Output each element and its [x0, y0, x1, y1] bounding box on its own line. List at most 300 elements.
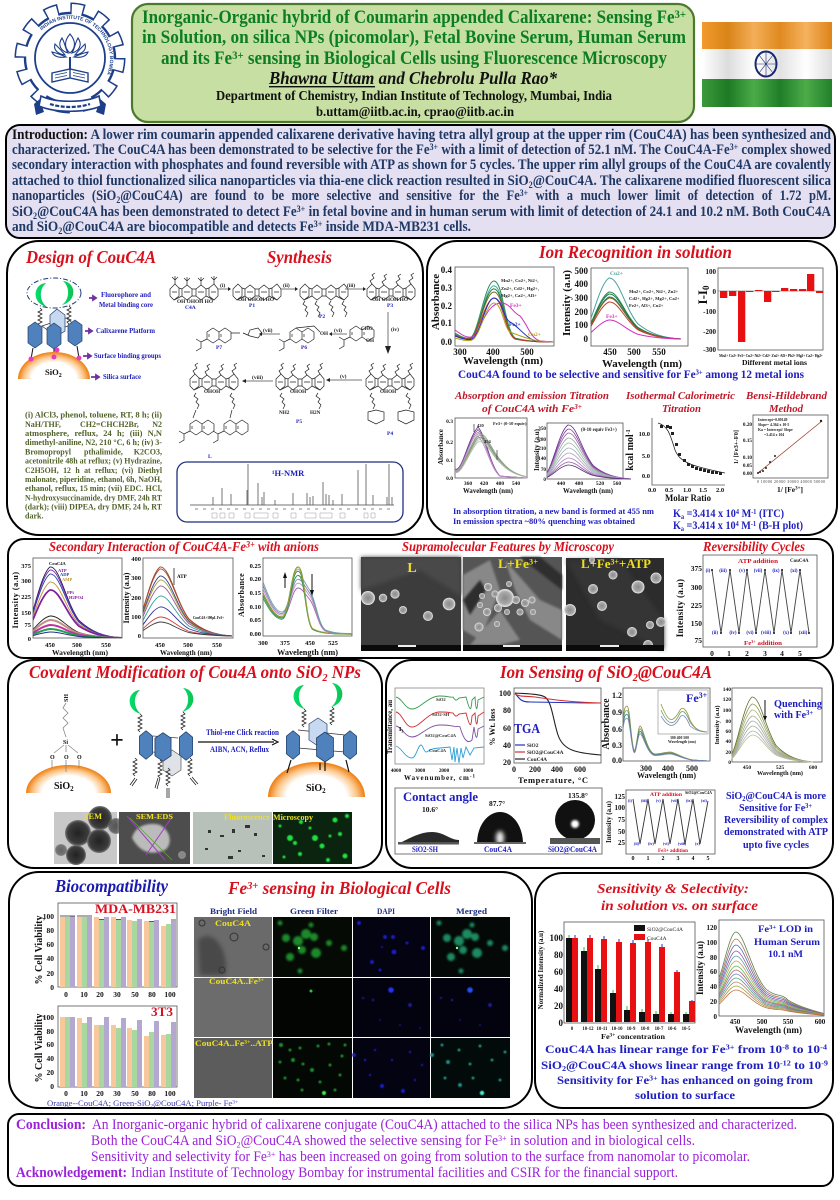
chart: viability MDA-MB231: 10 [80, 990, 88, 999]
title heading: in Solution, on silica NPs (picomolar), Fetal Bovine Serum, Human Serum [142, 27, 686, 48]
chart: TGA: Temperature, °C [518, 775, 588, 785]
chart: LOD in human serum: Human Serum [754, 938, 820, 948]
chart: reversibility cycles: (ii) [712, 631, 718, 636]
image: SEM L [361, 557, 461, 651]
chart: emission of metal ions [561, 266, 688, 370]
chart: emission with anions: Intensity (a.u) [10, 571, 20, 629]
chart: absorbance with ATP: 0.10 [250, 604, 261, 611]
arrow: thiol-ene click reaction: Thiol-ene Click reaction [206, 727, 279, 737]
chart: normalized intensity bars: Normalized Intensity (a.u) [537, 930, 545, 1009]
chart: reversibility cycles: 0 [710, 649, 714, 658]
chart: emission quenching on silica: 3+ [806, 709, 813, 717]
chart: normalized intensity bars: 100 [550, 933, 564, 943]
panel: introduction: nanoparticles (SiO [12, 188, 133, 204]
chart: Benesi-Hildebrand plot: 0.00 [743, 471, 752, 477]
chart: TGA: 40 [503, 741, 511, 750]
chart: ITC titration: -1 [626, 429, 632, 434]
chart: reversibility on silica: Fe3+ addition [658, 849, 688, 854]
chart: ITC titration: 1.5 [699, 487, 708, 494]
chart: reversibility on silica: 2 [662, 856, 664, 862]
panel: conclusion and acknowledgement: Sensitivity and selectivity for Fe [91, 1149, 279, 1165]
summary text: upto five cycles [743, 839, 810, 851]
chart: reversibility cycles: 300 [691, 583, 702, 592]
summary text: SiO [541, 1058, 560, 1072]
synthesis scheme: P7 [216, 345, 222, 351]
chart: emission with ATP: Intensity (a.u) [121, 572, 131, 624]
affiliation: b.uttam@iitb.ac.in, cprao@iitb.ac.in [316, 104, 514, 119]
chart: absorbance of metal ions: 0.2 [441, 301, 452, 311]
image: SEM-EDS [119, 812, 190, 864]
title heading: 3+ [675, 7, 686, 21]
legend: Orange--CouC4A; Green-SiO [47, 1099, 143, 1108]
diagram: thiol silica: SiO [54, 781, 70, 792]
diagram: thiol silica: 2 [70, 785, 74, 793]
chart: normalized intensity bars [537, 922, 695, 1041]
chart: emission of metal ions: 500 [574, 266, 588, 276]
image: contact angle: SiO2-SH [412, 845, 439, 854]
panel: introduction: 2 [33, 211, 38, 221]
image: fluorescence green: Microscopy [273, 813, 313, 822]
diagram: CouC4A design [18, 278, 90, 379]
chart: TGA [488, 688, 601, 785]
chart: absorption titration: Wavelength (nm) [463, 487, 514, 495]
chart: absorbance of metal ions: Mn2+, Co2+, Ni2+, [501, 278, 539, 283]
chart: emission with anions: AMP [62, 577, 72, 582]
image: contact angle: 87.7° [489, 799, 505, 808]
notes: binding constants: K [673, 508, 682, 520]
chart: absorption titration [437, 418, 527, 495]
chart: ITC titration [625, 418, 725, 503]
chart: emission quenching on silica: 0 [728, 760, 731, 766]
reagents text: (i) AlCl3, phenol, toluene, RT, 8 h; (ii) [25, 411, 162, 420]
chart: reversibility on silica: (v) [656, 798, 661, 803]
summary text: Sensitive for Fe [739, 802, 812, 814]
chart: absorbance of metal ions: Zn2+, Cd2+, Hg2+, [501, 286, 539, 291]
chart: viability 3T3: 60 [46, 1040, 54, 1049]
chart: absorbance of metal ions: 0.1 [441, 318, 452, 328]
chart: emission with ATP: 550 [212, 642, 222, 649]
chart: emission of metal ions: 400 [574, 279, 588, 289]
chart: reversibility cycles: 225 [691, 601, 702, 610]
chart: normalized intensity bars: 60 [554, 967, 564, 977]
chart: bar I-I0 for metal ions: -300 [703, 346, 716, 354]
summary text: 3+ [805, 802, 812, 810]
chart: reversibility on silica: 125 [614, 793, 626, 801]
chart: reversibility on silica: 3 [676, 856, 680, 862]
chart: absorption titration: Fe3+ (0-10 equiv) [493, 421, 527, 426]
chart: emission with ATP: CouC4A+100µL Fe3+ [193, 616, 224, 620]
panel: conclusion and acknowledgement: 3+ [267, 1149, 276, 1159]
column headings: DAPI [377, 906, 396, 916]
image: contact angle: SiO2@CouC4A [548, 845, 597, 854]
chart: 1H-NMR spectrum: H-NMR [274, 468, 305, 478]
heading: in solution vs. on surface [601, 899, 758, 914]
chart: emission titration: 140 [538, 456, 546, 462]
chart: viability 3T3: % Cell Viability [34, 1014, 45, 1082]
chart: reversibility cycles: 75 [694, 636, 702, 645]
panel: conclusion and acknowledgement [8, 1114, 833, 1186]
chart: ITC titration: 0.5 [665, 487, 674, 494]
chart: TGA: SiO2 [527, 743, 539, 749]
chart: absorbance of metal ions: 0.0 [441, 337, 452, 347]
chart: emission titration: (0-10 equiv Fe3+) [581, 428, 617, 433]
chart: reversibility on silica: (ii) [634, 841, 640, 846]
chart: bar I-I0 for metal ions: Mn2+ Co2+ Fe3+ Cu2+ Ni2+ Cd2+ Zn2+ Al3+ Pb2+ Mg2+ Ca2+ Hg2+ [719, 354, 824, 358]
chart: LOD in human serum: 450 [730, 1018, 741, 1026]
chart: IR spectra: Wavenumber, cm [404, 774, 469, 782]
chart: viability 3T3: 80 [46, 1027, 54, 1036]
summary text: SiO [726, 790, 744, 802]
image: SEM-EDS: SEM-EDS [136, 812, 173, 821]
chart: Benesi-Hildebrand plot [733, 415, 828, 494]
chart: viability MDA-MB231: 50 [131, 990, 139, 999]
chart: IR spectra: 1000 [463, 768, 474, 774]
chart: absorbance with ATP: 0.15 [250, 590, 262, 597]
chart: normalized intensity bars: 10-6 [668, 1027, 677, 1032]
synthesis scheme: P3 [387, 303, 393, 309]
chart: absorbance with ATP: 0.25 [250, 563, 262, 570]
synthesis scheme: NH2 [279, 410, 290, 416]
chart: emission of metal ions: Mn2+, Co2+, Ni2+, Zn2+ [629, 289, 679, 294]
chart: reversibility cycles: 5 [798, 649, 802, 658]
image: SEM L+Fe [463, 556, 562, 651]
chart: ITC titration: 5.0 [642, 453, 650, 460]
heading: Covalent Modification of Cou4A onto SiO [29, 662, 341, 682]
chart: TGA: 80 [503, 706, 511, 715]
panel: introduction: complex showed [738, 142, 831, 158]
chart: reversibility cycles: (vii) [754, 569, 763, 574]
legend: @CouC4A; Purple- Fe [153, 1099, 233, 1108]
diagram: thiol silica: O [77, 755, 82, 761]
chart: emission quenching on silica: 600 [809, 765, 817, 771]
summary text: -12 [780, 1058, 791, 1068]
chart: emission with anions: 75 [24, 622, 32, 629]
chart: viability 3T3: 0 [50, 1082, 54, 1091]
image grid: fluorescence microscopy [194, 917, 510, 1098]
chart: absorbance of metal ions: Fe3+ [510, 303, 522, 309]
heading: secondary interaction: Secondary Interaction of CouC4A-Fe [49, 540, 266, 555]
diagram: thiol silica: SH [64, 694, 70, 702]
chart: viability 3T3: 3T3 [151, 1004, 174, 1019]
reagents text: NaH/THF, [25, 420, 61, 429]
chart: Benesi-Hildebrand plot: 0.10 [743, 455, 752, 461]
chart: Benesi-Hildebrand plot: 0.05 [743, 463, 752, 469]
summary text: 3+ [726, 1042, 734, 1052]
chart: absorbance on silica with inset: 400 [662, 764, 674, 773]
panel: introduction: characterized. The CouC4A has been demonstrated to be selective for the Fe [12, 142, 483, 158]
chart: IR spectra: -1 [470, 774, 476, 780]
chart: emission with anions: 0 [28, 636, 31, 643]
chart: absorbance on silica with inset: 0.6 [612, 725, 622, 734]
chart: normalized intensity bars: SiO2@CouC4A [647, 927, 683, 933]
chart: absorbance of metal ions: 400 [486, 347, 500, 357]
chart: emission with ATP: 300 [131, 575, 141, 582]
synthesis scheme: P4 [387, 431, 393, 437]
chart: emission titration: 70 [541, 467, 546, 473]
title heading: and its Fe [161, 48, 240, 69]
diagram: thiol silica: Si [63, 740, 68, 746]
chart: absorbance of metal ions: Mg2+, Ca2+, Al3+ [501, 293, 537, 298]
panel: conclusion and acknowledgement: 3+ [498, 1133, 507, 1143]
chart: viability MDA-MB231: 80 [46, 926, 54, 935]
chart: normalized intensity bars: concentration [615, 1032, 666, 1041]
chart: absorbance with ATP: 300 [258, 640, 268, 647]
plus sign: + [110, 728, 124, 754]
legend: 2 [150, 1104, 154, 1110]
chart: viability 3T3: 30 [113, 1089, 121, 1098]
chart: absorbance on silica with inset: 500 [686, 764, 698, 773]
chart: absorbance on silica with inset: 3+ [699, 691, 708, 700]
chart: viability MDA-MB231: 100 [164, 990, 176, 999]
synthesis scheme: (ii) [283, 282, 290, 289]
chart: absorbance with ATP: 375 [280, 640, 291, 647]
chart: absorbance on silica with inset: 0.0 [612, 756, 622, 765]
chart: bar I-I0 for metal ions: -200 [703, 328, 716, 336]
chart: IR spectra: Transmittance, au [386, 700, 394, 754]
chart: emission of metal ions: Cu2+ [610, 271, 623, 277]
summary text: solution to surface [635, 1088, 736, 1102]
notes: binding constants: (B-H plot) [756, 520, 803, 532]
notes: binding constants: =3.414 x 10 [684, 508, 736, 520]
synthesis scheme: OHOH [204, 389, 220, 395]
chart: emission of metal ions: Fe2+, Al3+, Cu2+ [629, 303, 664, 308]
subheadings: Bensi-Hildebrand [745, 390, 827, 402]
row: CouC4A with Fe and ATP: CouC4A..Fe [195, 1039, 237, 1048]
chart: absorbance with ATP: 525 [328, 640, 339, 647]
chart: absorption titration: 480 [496, 481, 504, 487]
chart: TGA: SiO2@CouC4A [527, 750, 564, 756]
chart: reversibility on silica: 25 [618, 839, 626, 847]
chart: reversibility on silica: 100 [614, 804, 626, 812]
chart: absorbance on silica with inset: 0.3 [612, 741, 622, 750]
summary text: demonstrated with ATP [724, 826, 828, 838]
chart: Benesi-Hildebrand plot: 1/ [Fe [777, 485, 795, 494]
heading: secondary interaction: with anions [255, 540, 319, 555]
chart: absorbance on silica with inset: Fe [686, 691, 699, 705]
summary text: -9 [821, 1058, 828, 1068]
diagram: CouC4A on silica: SiO [306, 783, 322, 794]
chart: emission with anions: CouC4A [49, 561, 67, 566]
synthesis scheme: CHO [361, 326, 373, 332]
panel: introduction: inside MDA-MB231 cells. [322, 219, 471, 235]
logo: IIT Bombay emblem [14, 2, 126, 115]
chart: emission titration: 560 [613, 481, 621, 487]
chart: emission of metal ions: Wavelength (nm) [602, 358, 682, 370]
synthesis scheme: OH OHOH HO [372, 297, 408, 303]
row: CouC4A: CouC4A [215, 919, 251, 928]
chart: emission of metal ions: 100 [574, 320, 588, 330]
chart: 1H-NMR spectrum: 1 [272, 470, 275, 476]
chart: emission titration: 440 [557, 481, 565, 487]
chart: LOD in human serum: Fe [758, 925, 768, 935]
notes: titration: In emission spectra ~80% quenching was obtained [453, 516, 635, 526]
chart: reversibility cycles: (i) [706, 569, 711, 574]
column headings: Green Filter [290, 906, 338, 916]
summary text: 3+ [649, 1074, 658, 1082]
chart: viability MDA-MB231: 40 [46, 954, 54, 963]
panel: introduction: @CouC4A) are found to be more selective and sensitive for the Fe [120, 188, 520, 204]
chart: reversibility cycles: (iv) [729, 631, 737, 636]
chart: TGA: 20 [503, 758, 511, 767]
summary text: from 10 [734, 1042, 782, 1056]
chart: Benesi-Hildebrand plot: ] [800, 485, 803, 494]
chart: normalized intensity bars: 40 [554, 984, 564, 994]
affiliation [216, 88, 612, 119]
chart: TGA: CouC4A [527, 757, 547, 763]
diagram labels: Calixarene Platform [96, 327, 155, 335]
chart: reversibility cycles: Intensity (a.u) [675, 579, 685, 637]
chart: emission with anions: 375 [21, 563, 32, 570]
chart: viability 3T3: 50 [131, 1089, 139, 1098]
chart: emission with anions: H2PO4 [69, 595, 84, 600]
column headings: Bright Field [210, 906, 257, 916]
chart: IR spectra: SiO2 [436, 697, 446, 702]
chart: emission with ATP: Wavelength (nm) [160, 648, 212, 657]
chart: emission with anions: 550 [101, 642, 111, 649]
chart: reversibility on silica: (vi) [663, 841, 669, 846]
chart: LOD in human serum: 10.1 nM [768, 950, 803, 960]
notes: binding constants: 4 [736, 508, 739, 516]
chart: TGA: 400 [551, 765, 563, 774]
chart: absorption titration: 454 [484, 439, 492, 444]
chart: viability MDA-MB231 [34, 901, 177, 999]
chart: reversibility cycles: 375 [691, 564, 702, 573]
chart: normalized intensity bars: 10-10 [611, 1027, 623, 1032]
chart: emission quenching on silica: 80 [726, 719, 731, 725]
chart: emission of metal ions: 0 [584, 334, 588, 344]
chart: reversibility cycles: (x) [783, 631, 789, 636]
chart: viability MDA-MB231: 0 [50, 983, 54, 992]
image: SEM L: L [407, 561, 417, 576]
chart: reversibility on silica: 5 [706, 856, 710, 862]
reagents text: acetonitrile 48h at reflux; (v) Hydrazine, [25, 457, 162, 466]
chart: emission with anions: 150 [21, 610, 31, 617]
chart: LOD in human serum [695, 920, 826, 1035]
chart: 1H-NMR spectrum [177, 462, 403, 522]
finding text: 3+ [696, 368, 703, 376]
image: TEM [54, 806, 124, 865]
notes: titration: In absorption titration, a new band is formed at 455 nm [453, 506, 654, 516]
chart: reversibility on silica: (viii) [678, 841, 687, 846]
chart: LOD in human serum: 550 [783, 1018, 794, 1026]
chart: emission of metal ions: 450 [603, 347, 617, 357]
chart: Benesi-Hildebrand plot: Ka = Intercept/ Slope [758, 428, 793, 432]
chart: reversibility on silica: 75 [618, 816, 626, 824]
panel: introduction: 3+ [430, 142, 438, 152]
notes: binding constants: -1 [751, 520, 756, 528]
heading: secondary interaction: 3+ [245, 540, 255, 550]
chart: IR spectra: 3 [401, 728, 403, 734]
panel: conclusion and acknowledgement: has been increased on going from solution to the surface from nanomolar to picomolar. [275, 1149, 750, 1165]
chart: normalized intensity bars: Fe [601, 1032, 609, 1041]
heading: cell sensing: 3+ [246, 880, 258, 892]
image: fluorescence bright field: Fluorescence [224, 813, 270, 822]
chart: viability 3T3: 20 [46, 1068, 54, 1077]
image: SEM L+Fe: 3+ [529, 558, 538, 566]
chart: LOD in human serum: LOD in [776, 925, 814, 935]
summary text: to 10 [791, 1058, 821, 1072]
panel: introduction: 2 [116, 195, 121, 205]
chart: reversibility cycles: 3 [763, 649, 767, 658]
chart: viability MDA-MB231: 80 [148, 990, 156, 999]
chart: emission with anions: ADP [60, 572, 69, 577]
chart: emission of metal ions: 200 [574, 307, 588, 317]
chart: absorbance on silica with inset [601, 688, 710, 780]
chart: emission quenching on silica: 100 [723, 708, 731, 714]
synthesis scheme: (iii) [347, 282, 355, 289]
chart: emission titration [533, 423, 631, 495]
affiliation: Department of Chemistry, Indian Institute of Technology, Mumbai, India [216, 88, 612, 103]
synthesis scheme: OH [320, 331, 328, 337]
row: CouC4A with Fe: CouC4A..Fe [209, 977, 251, 986]
chart: viability 3T3: 20 [96, 1089, 104, 1098]
panel: ion recognition in solution [427, 241, 837, 535]
image: fluorescence bright field [193, 812, 272, 864]
subheadings: 3+ [573, 403, 582, 411]
chart: emission quenching on silica: 60 [726, 729, 731, 735]
chart: emission titration: 350 [538, 426, 546, 432]
chart: absorbance of metal ions [430, 265, 554, 367]
panel: design and synthesis [7, 241, 423, 535]
chart: emission with anions: 225 [21, 594, 32, 601]
chart: Benesi-Hildebrand plot: Intercept=0.00149 [758, 418, 788, 422]
chart: bar I-I0 for metal ions: 0 [701, 285, 711, 290]
diagram: CouC4A on silica: 2 [322, 787, 326, 795]
image: contact angle: Contact angle [403, 789, 478, 804]
chart: viability 3T3: 100 [164, 1089, 176, 1098]
chart: TGA: 0 [512, 765, 516, 774]
notes: binding constants: M [739, 508, 751, 520]
chart: reversibility cycles: 150 [691, 619, 702, 628]
heading: Sensitivity & Selectivity: [597, 882, 749, 897]
synthesis scheme: C4A [185, 305, 196, 311]
chart: ITC titration: 2.0 [716, 487, 724, 494]
chart: normalized intensity bars: 3+ [610, 1034, 615, 1038]
image: contact angle [395, 788, 602, 854]
panel: biocompatibility and cell sensing [9, 872, 532, 1110]
chart: emission quenching on silica: 450 [743, 765, 751, 771]
chart: normalized intensity bars: 80 [554, 950, 564, 960]
chart: reversibility cycles: (xi) [790, 569, 798, 574]
chart: Benesi-Hildebrand plot: =3.414 x 104 [764, 433, 784, 437]
notes: binding constants: 4 [736, 520, 739, 528]
diagram labels: Fluorophore and [101, 291, 151, 299]
chart: reversibility on silica [605, 790, 715, 862]
chart: LOD in human serum: 60 [710, 968, 718, 976]
synthesis scheme: OHOH [290, 389, 306, 395]
chart: reversibility on silica: (vii) [671, 798, 679, 803]
chart: reversibility on silica: 4 [692, 856, 694, 862]
chart: emission of metal ions: Intensity (a.u) [561, 270, 573, 336]
chart: viability MDA-MB231: 20 [46, 969, 54, 978]
chart: emission with anions: 300 [21, 578, 31, 585]
synthesis scheme [170, 273, 415, 460]
heading: @CouC4A [638, 662, 712, 682]
panel: introduction: 3+ [730, 142, 738, 152]
synthesis scheme: (v) [340, 373, 347, 380]
summary text: Reversibility of complex [724, 814, 828, 826]
chart: emission with anions: 450 [45, 642, 55, 649]
synthesis scheme: L [208, 454, 212, 460]
chart: absorbance on silica with inset: 0.9 [612, 708, 622, 717]
title panel [132, 4, 694, 122]
image: contact angle: 135.8° [568, 791, 588, 800]
chart: TGA: % Wt. loss [488, 709, 497, 745]
chart: LOD in human serum: Wavelength (nm) [735, 1025, 802, 1035]
chart: LOD in human serum: 600 [815, 1018, 826, 1026]
chart: ITC titration: 0.0 [642, 473, 650, 480]
title heading: sensing in Biological Cells using Fluorescence Microscopy [244, 48, 667, 69]
